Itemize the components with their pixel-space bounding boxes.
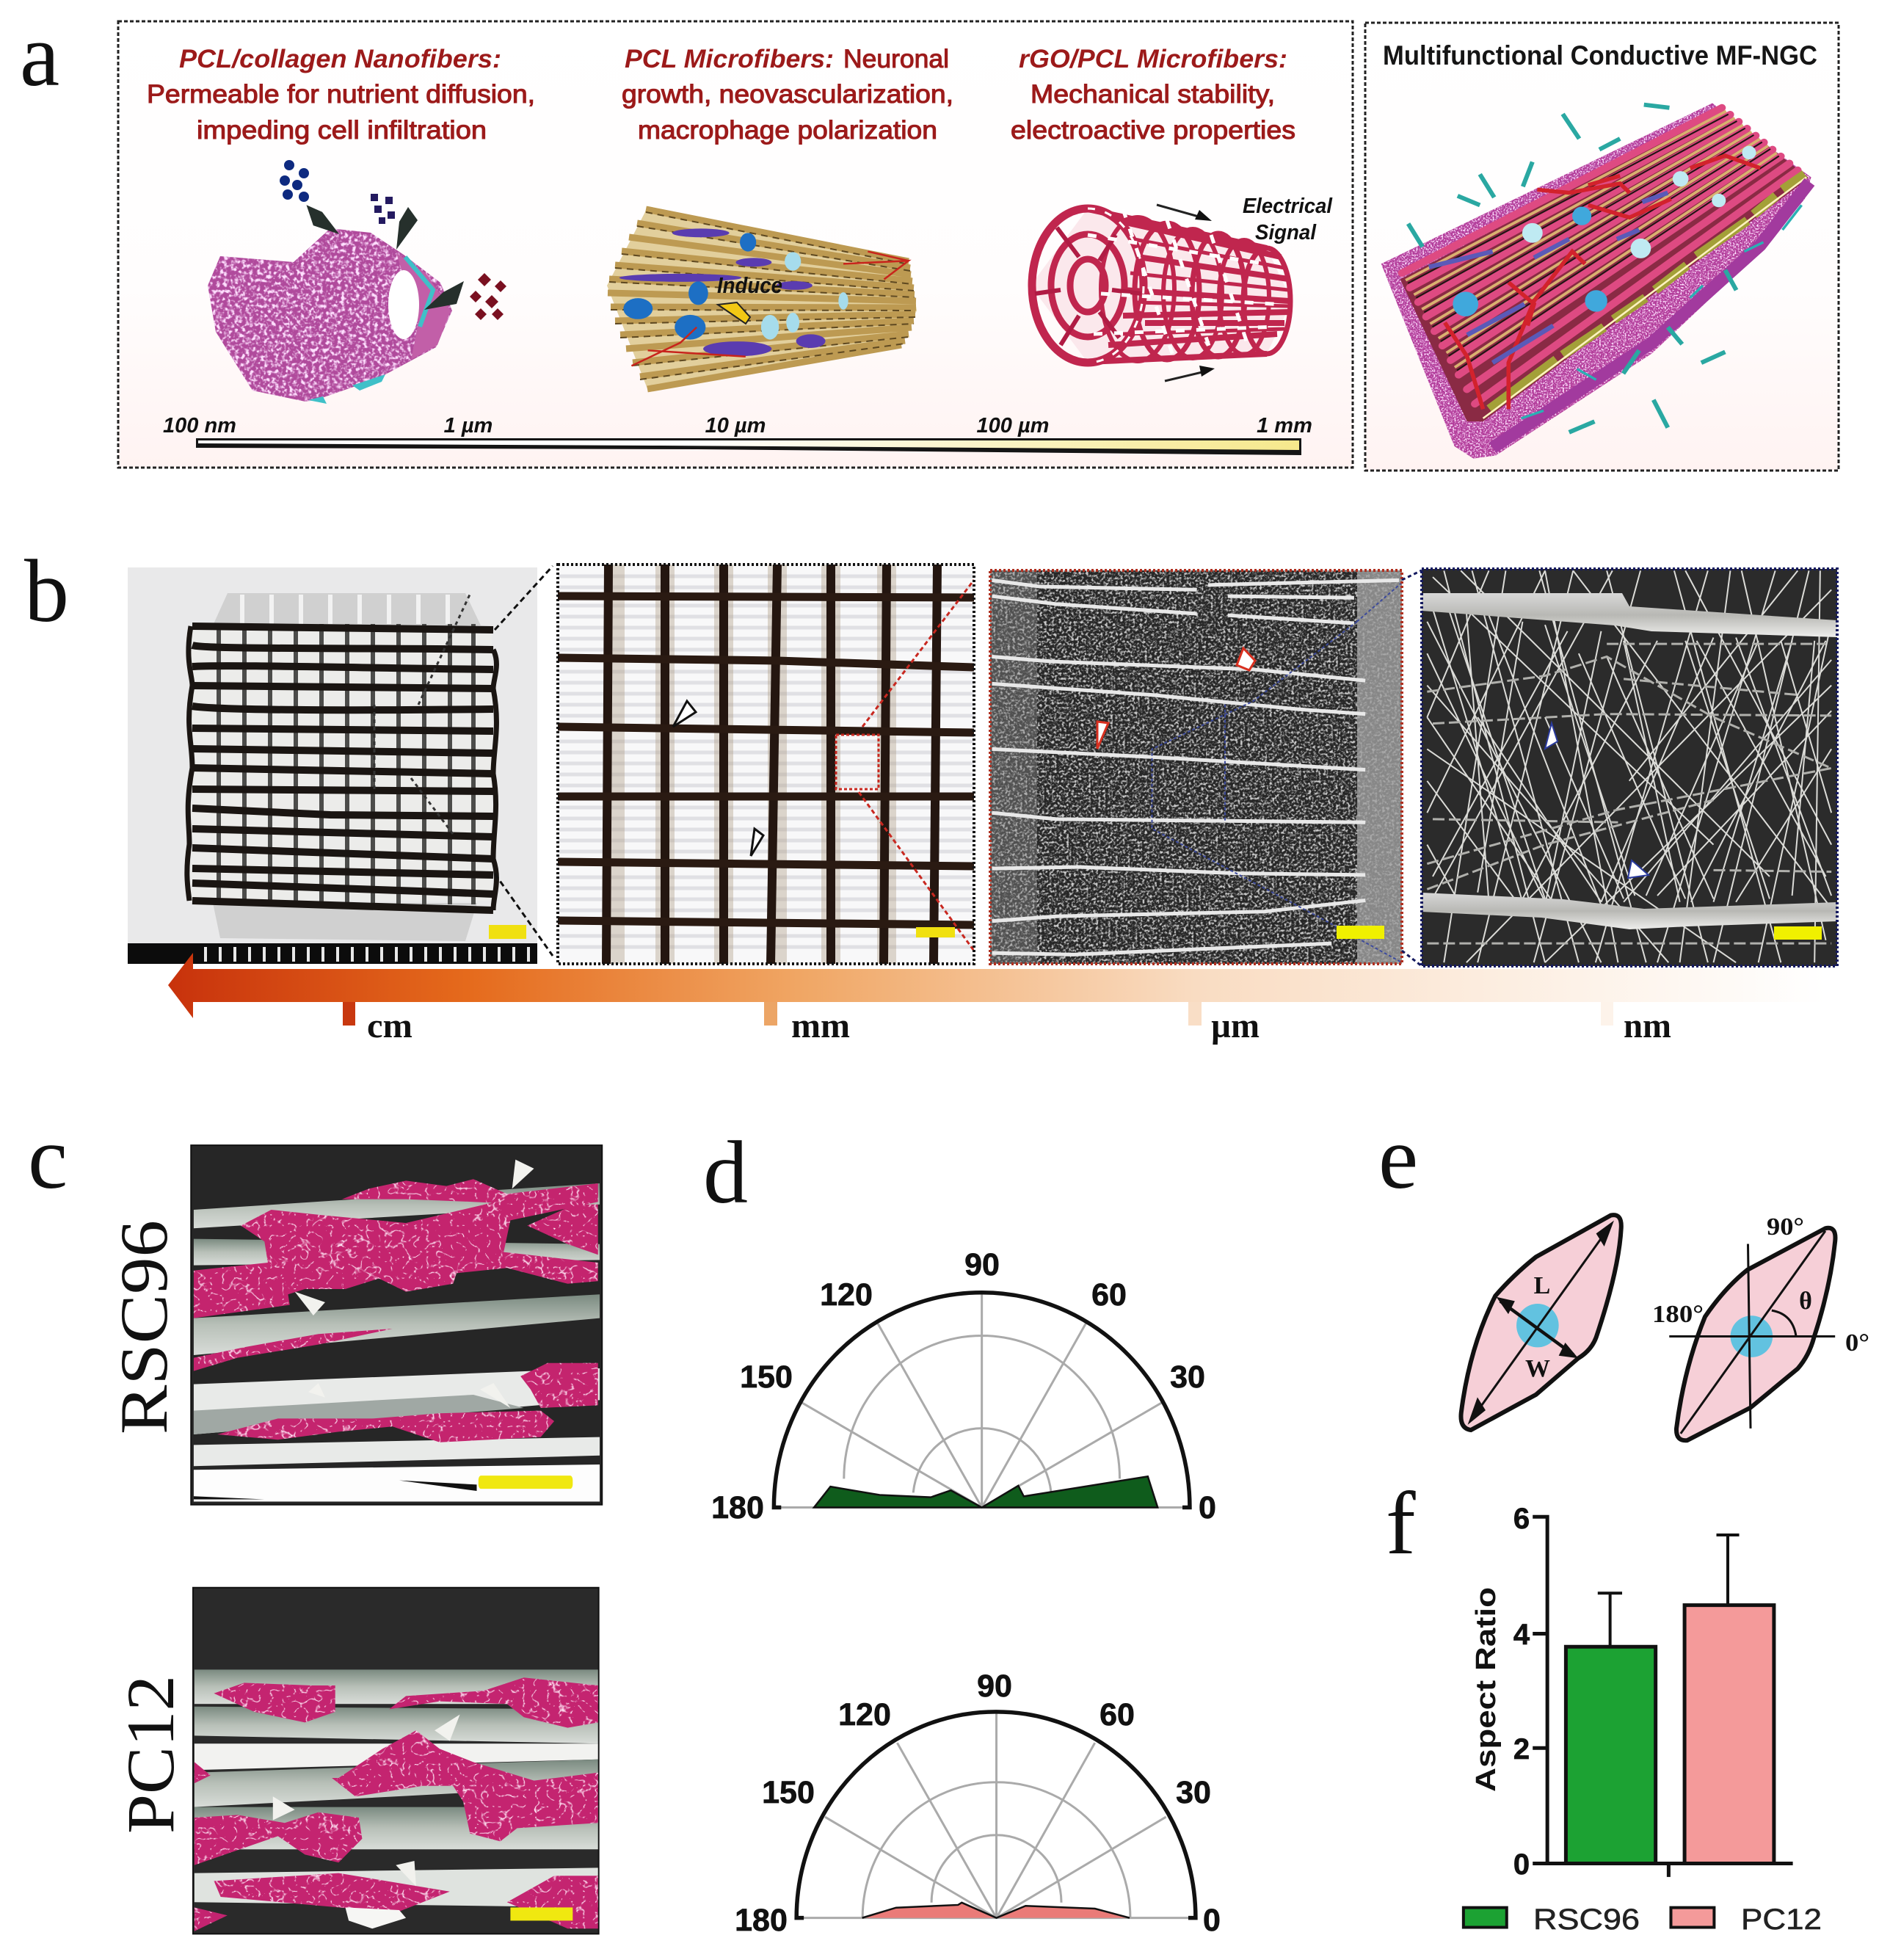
- polar chart: PC12: 60: [1100, 1697, 1135, 1732]
- panel c: SEM images of cells: [106, 1145, 602, 1934]
- diagram: orientation angle: [1652, 1213, 1869, 1440]
- diagram: orientation angle: 90°: [1767, 1213, 1804, 1241]
- border: nanofiber image: [1422, 569, 1837, 966]
- error bar PC12: [1717, 1535, 1740, 1605]
- icons: teal rods: [1409, 105, 1737, 432]
- heading: PCL microfibers: Neuronal: [843, 45, 949, 73]
- scale labels: 1 mm: [1257, 414, 1312, 438]
- connector: blue dashed lines: [1402, 570, 1422, 966]
- legend labels: RSC96: [1533, 1903, 1640, 1936]
- polar chart: PC12: [735, 1669, 1221, 1938]
- legend swatch RSC96: [1464, 1908, 1507, 1928]
- heading: rGO/PCL microfibers: rGO/PCL Microfibers:: [1019, 45, 1287, 73]
- arrowhead upper: [1195, 210, 1212, 221]
- panel a right: multifunctional conductive MF-NGC: [1365, 23, 1839, 471]
- panel b: multiscale images: [128, 565, 1837, 1045]
- photo: whole mesh: [128, 567, 537, 964]
- arrow: signal arrow upper: [1157, 205, 1204, 218]
- border: grid image: [558, 565, 974, 964]
- photo: PC12: [193, 1588, 599, 1934]
- axis tick labels: 4: [1513, 1619, 1530, 1651]
- label: Electrical Signal: Electrical: [1243, 195, 1333, 218]
- heading: PCL/collagen nanofibers: [147, 45, 535, 145]
- unit labels: mm: [791, 1006, 850, 1045]
- scale labels: 1 µm: [444, 414, 493, 438]
- label: Induce: Induce: [717, 272, 782, 298]
- unit labels: [367, 1006, 1671, 1045]
- panel letter c: c: [28, 1108, 68, 1208]
- legend swatch PC12: [1671, 1908, 1714, 1928]
- scale bar: [196, 438, 1301, 455]
- unit labels: nm: [1624, 1006, 1671, 1045]
- tick nm: [1601, 1002, 1613, 1026]
- photo: RSC96: [191, 1145, 602, 1505]
- panel letter a: a: [20, 6, 59, 105]
- heading: rGO/PCL microfibers: Mechanical stability,: [1031, 80, 1275, 109]
- polar chart: PC12: 90: [977, 1669, 1012, 1704]
- heading: PCL/collagen nanofibers: PCL/collagen Nanofibers:: [179, 45, 501, 73]
- heading: rGO/PCL microfibers: electroactive properties: [1011, 116, 1295, 145]
- panel letter d: d: [703, 1123, 748, 1222]
- arrow: dark wedge 3: [424, 281, 464, 310]
- panel f: aspect ratio bar chart: [1464, 1503, 1822, 1936]
- arrow: dark wedge 1: [308, 207, 336, 232]
- heading: PCL/collagen nanofibers: impeding cell infiltration: [197, 116, 487, 145]
- axis tick labels: 6: [1513, 1503, 1530, 1535]
- illustration: rGO red mesh cylinder: [1031, 208, 1292, 363]
- heading: rGO/PCL microfibers: [1011, 45, 1295, 145]
- scale arrow: [168, 953, 1825, 1026]
- icon: dark red nutrient dots: [470, 273, 506, 320]
- scale labels: 10 µm: [705, 414, 766, 438]
- polar chart: PC12: 150: [762, 1775, 815, 1810]
- arrow: signal arrow lower: [1165, 371, 1205, 381]
- label: RSC96: RSC96: [106, 1220, 181, 1434]
- label: Electrical Signal: Signal: [1255, 221, 1317, 244]
- heading: Multifunctional Conductive MF-NGC: Multifunctional Conductive MF-NGC: [1383, 40, 1817, 70]
- diagram: orientation angle: θ: [1799, 1288, 1812, 1315]
- illustration: nanofiber tube: [208, 160, 506, 404]
- axis tick labels: 2: [1513, 1733, 1530, 1765]
- tick cm: [343, 1002, 355, 1026]
- heading: PCL microfibers: [622, 45, 953, 145]
- heading: PCL microfibers: macrophage polarization: [638, 116, 937, 145]
- polar chart: PC12: 180: [735, 1903, 788, 1938]
- photo: SEM microfiber: [990, 570, 1405, 964]
- photo: woven grid: [558, 565, 984, 964]
- connector: dashed zoom lines 1: [495, 566, 553, 956]
- axis tick labels: 0: [1513, 1848, 1530, 1881]
- polar chart: RSC96: 150: [740, 1360, 793, 1395]
- panel letter e: e: [1378, 1108, 1418, 1208]
- illustration: gold microfiber cone: [607, 206, 917, 391]
- legend labels: PC12: [1741, 1903, 1822, 1936]
- bar PC12: [1684, 1605, 1774, 1863]
- heading: PCL microfibers: PCL Microfibers:: [625, 45, 834, 73]
- photo: SEM nanofiber: [1422, 569, 1837, 966]
- panel letter b: b: [24, 542, 69, 641]
- icon: dark blue nutrient dots: [280, 160, 309, 202]
- arrow: dark wedge 2: [396, 207, 418, 250]
- diagram: length and width: L: [1534, 1272, 1550, 1299]
- tick mm: [764, 1002, 777, 1026]
- unit labels: µm: [1211, 1006, 1260, 1045]
- border: microfiber image: [990, 570, 1402, 964]
- error bar RSC96: [1598, 1593, 1622, 1647]
- bar RSC96: [1566, 1647, 1656, 1863]
- diagram: length and width: [1461, 1215, 1621, 1430]
- label: PC12: PC12: [113, 1675, 188, 1834]
- panel letter f: f: [1386, 1474, 1416, 1573]
- scale labels: 100 nm: [163, 414, 236, 438]
- polar chart: PC12: 120: [838, 1697, 891, 1732]
- heading: PCL microfibers: growth, neovascularization,: [622, 80, 953, 109]
- heading: PCL/collagen nanofibers: Permeable for nutrient diffusion,: [147, 80, 535, 109]
- polar chart: RSC96: 0: [1199, 1490, 1216, 1525]
- polar chart: PC12: 30: [1176, 1775, 1211, 1810]
- arrowhead lower: [1199, 366, 1215, 377]
- axes: [1533, 1517, 1793, 1877]
- axis tick labels: [1513, 1503, 1530, 1881]
- polar chart: RSC96: 90: [964, 1247, 1000, 1282]
- scale labels: [163, 414, 1312, 438]
- polar chart: RSC96: 60: [1091, 1277, 1127, 1313]
- scale labels: 100 µm: [977, 414, 1049, 438]
- panel a: scale-dependent fibers: [118, 21, 1353, 468]
- diagram: orientation angle: 180°: [1652, 1301, 1704, 1328]
- tick um: [1188, 1002, 1202, 1026]
- diagram: length and width: W: [1525, 1355, 1550, 1382]
- polar chart: PC12: 0: [1203, 1903, 1221, 1938]
- panel e: cell morphology diagrams: [1461, 1213, 1869, 1440]
- polar chart: RSC96: 120: [820, 1277, 873, 1313]
- axis title: Aspect Ratio: [1471, 1587, 1502, 1792]
- label: Electrical Signal: [1243, 195, 1333, 244]
- panel d: polar plots: [711, 1247, 1221, 1938]
- illustration: conduit: [1381, 104, 1811, 459]
- polar chart: RSC96: [711, 1247, 1216, 1525]
- polar chart: RSC96: 30: [1170, 1360, 1205, 1395]
- legend labels: [1533, 1903, 1822, 1936]
- diagram: orientation angle: 0°: [1845, 1329, 1869, 1357]
- arrow: yellow induce arrow: [718, 302, 750, 324]
- polar chart: RSC96: 180: [711, 1490, 764, 1525]
- unit labels: cm: [367, 1006, 412, 1045]
- icon: small navy dots: [371, 194, 395, 224]
